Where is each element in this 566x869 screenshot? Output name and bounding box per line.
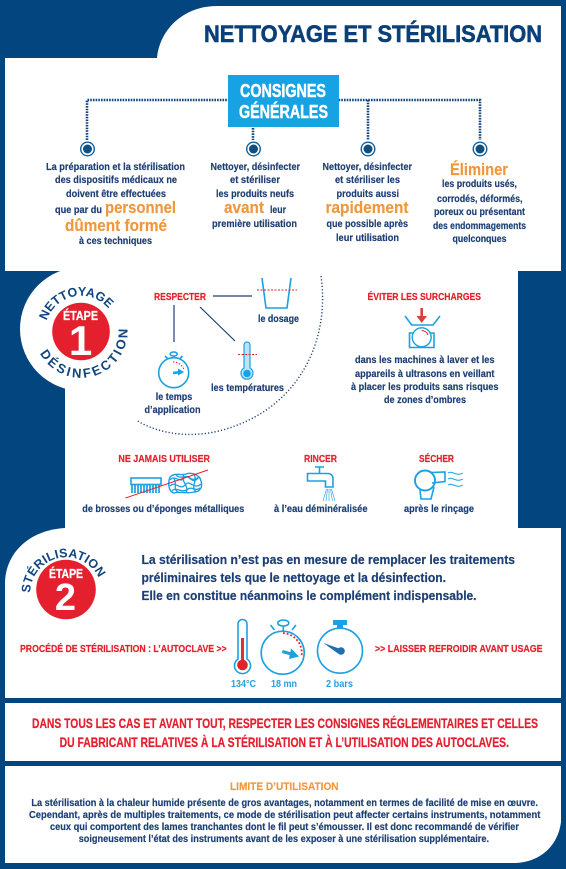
column 3: rapidement: Nettoyer, désinfecter: [322, 162, 412, 173]
icon: pressure gauge 2 bars: [318, 620, 362, 690]
sécher block: [404, 452, 474, 515]
respecter heading: RESPECTER: [154, 292, 207, 303]
column 2: avant: les produits neufs: [216, 189, 294, 200]
column 4: éliminer: [433, 160, 526, 245]
text: machines: à placer les produits sans risques: [351, 382, 499, 393]
panel: regulatory reminder: [5, 703, 561, 761]
column 2: avant: et stériliser: [230, 175, 280, 186]
panel: step 2 sterilisation: [5, 528, 561, 698]
column 3: rapidement: produits aussi: [336, 189, 399, 200]
column 1: personnel formé: La préparation et la stérilisation: [46, 162, 185, 173]
icon: tap: [308, 467, 335, 501]
column 1: personnel formé: des dispositifs médicaux ne: [55, 175, 177, 186]
dotted arc: [136, 276, 323, 434]
text: machines: appareils à ultrasons en veillant: [355, 369, 495, 380]
column 4: éliminer: poreux ou présentant: [434, 207, 526, 218]
icon: washing basket: [405, 308, 440, 348]
icon: brush and sponge crossed out: [126, 470, 208, 498]
panel: step 1 cleaning and disinfection: [20, 271, 518, 528]
column 2: avant: première utilisation: [212, 219, 297, 230]
label: le temps d'application: le temps: [156, 392, 193, 403]
step 2 badge: [22, 548, 106, 620]
column 1: personnel formé: à ces techniques: [79, 236, 152, 247]
text: sterilisation statement: Elle en constitue néanmoins le complément indispensable.: [142, 589, 476, 603]
text: usage limit body: [29, 798, 541, 845]
column 4: éliminer: corrodés, déformés,: [437, 194, 523, 205]
heading box: consignes générales: [228, 75, 339, 127]
text: machines: dans les machines à laver et les: [355, 355, 495, 366]
connector dotted lines: [87, 100, 480, 140]
text: usage limit body: ceux qui comportent des lames tranchantes dont le fil peut s’émousser. Il est donc recommandé de vérifier: [50, 822, 519, 833]
column 3: rapidement: leur utilisation: [336, 233, 399, 244]
panel: general instructions: [5, 6, 561, 271]
label: le temps d'application: [144, 392, 200, 416]
column 1: personnel formé: dûment formé: [65, 216, 167, 235]
text: sterilisation statement: La stérilisation n’est pas en mesure de remplacer les traitements: [142, 553, 515, 567]
column 4: éliminer: les produits usés,: [442, 179, 517, 190]
icon: thermometer: [238, 342, 257, 379]
column 2: avant: leur: [270, 205, 286, 216]
text: usage limit body: Cependant, après de multiples traitements, ce mode de stérilisation peut affecter certains instruments, notamment: [29, 810, 541, 821]
ne jamais utiliser block: [82, 454, 245, 515]
title: NETTOYAGE ET STÉRILISATION: [204, 20, 542, 48]
text: usage limit body: soigneusement l’état des instruments avant de les exposer à une stérilisation supplémentaire.: [79, 834, 489, 845]
ne jamais utiliser block: NE JAMAIS UTILISER: [118, 454, 211, 465]
icon: dosage beaker: [257, 278, 297, 308]
icon: stopwatch 18 mn: [261, 620, 304, 690]
column 1: personnel formé: personnel: [105, 198, 176, 217]
ne jamais utiliser block: de brosses ou d’éponges métalliques: [82, 504, 245, 515]
step 2 badge: STÉRILISATION: [22, 548, 106, 592]
cooling label: >> LAISSER REFROIDIR AVANT USAGE: [375, 644, 543, 655]
icon: hair dryer: [415, 470, 463, 499]
heading box: consignes générales: CONSIGNES: [240, 81, 326, 101]
process label: PROCÉDÉ DE STÉRILISATION : L’AUTOCLAVE >>: [20, 642, 227, 655]
text: machines: de zones d’ombres: [384, 395, 466, 406]
icon: thermometer 134°C: 134°C: [231, 678, 256, 690]
label: le temps d'application: d’application: [144, 405, 200, 416]
sécher block: après le rinçage: [404, 504, 474, 515]
step 1 badge: ÉTAPE: [63, 308, 98, 323]
sécher block: SÉCHER: [419, 452, 455, 465]
step 2 badge: ÉTAPE: [49, 566, 83, 581]
step 1 badge: DÉSINFECTION: [40, 330, 128, 378]
icon: thermometer 134°C: [231, 620, 256, 690]
column 1: personnel formé: [46, 162, 185, 247]
column 2: avant: Nettoyer, désinfecter: [210, 162, 300, 173]
label: les températures: les températures: [211, 383, 284, 394]
column 2: avant: avant: [224, 198, 264, 217]
icon: stopwatch 18 mn: 18 mn: [271, 678, 297, 690]
icon: pressure gauge 2 bars: 2 bars: [326, 678, 353, 690]
step 2 badge: 2: [55, 577, 76, 619]
rincer block: [274, 454, 368, 515]
rincer block: à l’eau déminéralisée: [274, 504, 368, 515]
label: le dosage: le dosage: [258, 314, 299, 325]
column 4: éliminer: quelconques: [452, 234, 507, 245]
text: sterilisation statement: [142, 553, 515, 603]
heading box: consignes générales: GÉNÉRALES: [239, 101, 328, 122]
bullets: [81, 142, 487, 156]
heading: limite d'utilisation: LIMITE D’UTILISATION: [230, 781, 339, 793]
connector lines: [174, 296, 252, 342]
step 1 badge: 1: [69, 317, 92, 364]
column 4: éliminer: Éliminer: [450, 160, 508, 179]
column 3: rapidement: et stériliser les: [335, 175, 400, 186]
step 1 badge: [20, 271, 128, 389]
column 1: personnel formé: que par du: [55, 205, 102, 216]
column 4: éliminer: des endommagements: [433, 221, 526, 232]
text: machines: [351, 355, 499, 406]
column 3: rapidement: [322, 162, 412, 244]
column 2: avant: [210, 162, 300, 230]
text: usage limit body: La stérilisation à la chaleur humide présente de gros avantages, notamment en termes de facilité de mise en œuvre.: [31, 798, 538, 809]
text: sterilisation statement: préliminaires tels que le nettoyage et la désinfection.: [142, 571, 446, 585]
panel: usage limit: [5, 766, 561, 863]
step 1 badge: NETTOYAGE: [39, 287, 114, 320]
rincer block: RINCER: [304, 454, 338, 465]
column 1: personnel formé: doivent être effectuées: [66, 189, 166, 200]
éviter les surcharges heading: ÉVITER LES SURCHARGES: [368, 290, 481, 303]
column 3: rapidement: rapidement: [326, 198, 409, 217]
column 3: rapidement: que possible après: [326, 219, 408, 230]
icon: stopwatch: [159, 352, 189, 388]
